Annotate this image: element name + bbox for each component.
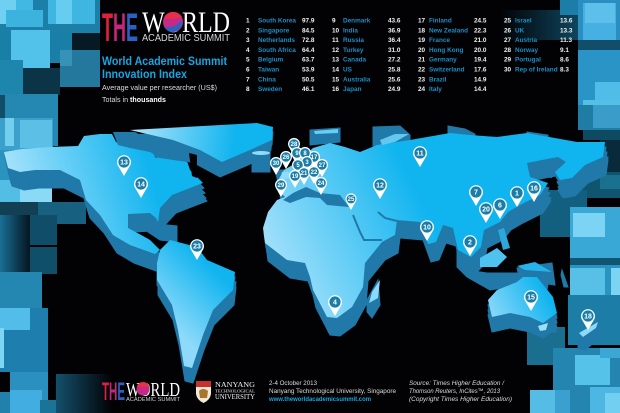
- table: ranks 17 to 24: 20.0: [474, 47, 487, 54]
- table: ranks 25 to 30: 25: [504, 18, 512, 24]
- table: ranks 9 to 16: Turkey: [343, 47, 364, 54]
- map pins: large: 20: [482, 206, 490, 214]
- footer: event details: [268, 380, 397, 403]
- table: ranks 17 to 24: 19: [418, 37, 426, 44]
- table: ranks 25 to 30: 9.1: [560, 47, 569, 54]
- map pins: Europe cluster: 25: [348, 197, 355, 203]
- footer: source: [409, 380, 512, 403]
- footer: event details: 2-4 October 2013: [269, 380, 318, 387]
- table: ranks 9 to 16: 13: [332, 57, 340, 64]
- table: ranks 1 to 8: 1: [246, 18, 250, 24]
- table: ranks 9 to 16: Russia: [343, 37, 364, 44]
- map pins: large: [117, 146, 595, 330]
- table: ranks 1 to 8: China: [258, 76, 276, 83]
- table: ranks 17 to 24: Germany: [429, 57, 457, 64]
- map pins: Europe cluster: 19: [292, 174, 299, 180]
- table: ranks 25 to 30: 13.6: [560, 18, 573, 24]
- map pins: large: 6: [498, 202, 502, 210]
- table: ranks 9 to 16: 10: [332, 27, 340, 34]
- table: ranks 17 to 24: 22.3: [474, 27, 487, 34]
- table: ranks 17 to 24: 19.4: [474, 57, 487, 64]
- map pins: large: 2: [468, 240, 472, 246]
- title: [102, 54, 227, 81]
- table: ranks 1 to 8: 6: [246, 66, 250, 74]
- map pins: Europe cluster: 26: [283, 155, 290, 161]
- table: ranks 25 to 30: 8.3: [560, 66, 569, 74]
- map pins: large: 16: [530, 186, 538, 192]
- map pins: Europe cluster: 27: [319, 163, 326, 169]
- map: small islands: [252, 129, 598, 337]
- table: ranks 9 to 16: 16: [332, 86, 340, 93]
- table: ranks 25 to 30: 28: [504, 47, 512, 54]
- table: ranks 25 to 30: 26: [504, 27, 512, 34]
- table: ranks 1 to 8: 46.1: [302, 86, 315, 93]
- table: ranks 17 to 24: 23: [418, 76, 426, 83]
- map pins: large: 14: [137, 182, 145, 188]
- table: ranks 25 to 30: Austria: [515, 37, 537, 44]
- table: ranks 1 to 8: Belgium: [258, 57, 284, 64]
- table: ranks 9 to 16: US: [343, 66, 353, 74]
- footer: event details: Nanyang Technological University, Singapore: [269, 388, 397, 395]
- map pins: Europe cluster: 8: [303, 151, 307, 157]
- footer logo: The World Academic Summit: ACADEMIC SUMMIT: [126, 397, 181, 403]
- table: ranks 17 to 24: New Zealand: [429, 27, 468, 34]
- map pins: Europe cluster: 17: [311, 155, 318, 161]
- map pins: Europe cluster: 24: [318, 181, 325, 187]
- footer logo: NTU wordmark: NANYANG: [215, 381, 255, 389]
- table: ranks 9 to 16: Denmark: [343, 18, 371, 24]
- table: ranks 1 to 8: Singapore: [258, 27, 290, 34]
- map: Greenland and Arctic Canada: [113, 123, 273, 178]
- table: ranks 25 to 30: Norway: [515, 47, 539, 54]
- title: World Academic Summit: [102, 54, 227, 68]
- footer: source: Thomson Reuters, InCites™, 2013: [409, 388, 501, 395]
- table: ranks 17 to 24: Hong Kong: [429, 47, 464, 54]
- footer logo: NTU wordmark: UNIVERSITY: [215, 393, 255, 401]
- table: ranks 9 to 16: Australia: [343, 76, 371, 83]
- subtitle: totals: Totals in thousands: [102, 95, 166, 104]
- table: ranks 17 to 24: 14.4: [474, 86, 487, 93]
- table: ranks 25 to 30: Israel: [515, 18, 532, 24]
- logo globe: [163, 12, 183, 32]
- table: ranks 17 to 24: France: [429, 37, 450, 44]
- map pins: Europe cluster: 3: [305, 160, 309, 166]
- table: ranks 1 to 8: 50.5: [302, 76, 315, 83]
- footer: event details: www.theworldacademicsummit.com: [268, 396, 371, 403]
- table: ranks 9 to 16: Canada: [343, 57, 367, 64]
- table: ranks 1 to 8: 5: [246, 57, 250, 64]
- table: ranks 1 to 8: 64.4: [302, 47, 315, 54]
- table: ranks 1 to 8: 63.7: [302, 57, 315, 64]
- table: ranks 9 to 16: 14: [332, 66, 340, 74]
- table: ranks 17 to 24: [418, 18, 487, 93]
- map: North America: [4, 134, 203, 254]
- table: ranks 1 to 8: 4: [246, 47, 250, 54]
- table: ranks 9 to 16: 25.6: [388, 76, 401, 83]
- table: ranks 17 to 24: 24.5: [474, 18, 487, 24]
- table: ranks 17 to 24: 17.6: [474, 66, 487, 74]
- table: ranks 1 to 8: South Africa: [258, 47, 296, 54]
- table: ranks 9 to 16: 12: [332, 47, 340, 54]
- table: ranks 1 to 8: Netherlands: [258, 37, 295, 44]
- table: ranks 9 to 16: 31.0: [388, 47, 401, 54]
- map: South America: [157, 240, 235, 368]
- map pins: large: 13: [120, 160, 128, 166]
- footer logo: NTU crest: [196, 381, 211, 403]
- panel: right decorative squares: [500, 0, 620, 413]
- table: ranks 25 to 30: 29: [504, 57, 512, 64]
- table: ranks 1 to 8: South Korea: [258, 18, 296, 24]
- table: ranks 17 to 24: Italy: [429, 86, 442, 93]
- table: ranks 25 to 30: [504, 18, 573, 74]
- map pins: Europe cluster: 22: [311, 170, 318, 176]
- table: ranks 25 to 30: Rep of Ireland: [515, 66, 558, 74]
- title: Innovation Index: [102, 67, 187, 81]
- footer logo: The World Academic Summit: WORLD: [126, 379, 180, 401]
- table: ranks 1 to 8: 97.9: [302, 18, 315, 24]
- map pins: Europe cluster: 30: [273, 161, 280, 167]
- table: ranks 25 to 30: UK: [515, 27, 525, 34]
- table: ranks 1 to 8: 53.9: [302, 66, 315, 74]
- footer: source: (Copyright Times Higher Education): [409, 396, 512, 403]
- table: ranks 25 to 30: 13.3: [560, 27, 573, 34]
- table: ranks 25 to 30: 11.3: [560, 37, 573, 44]
- table: ranks 1 to 8: 8: [246, 86, 250, 93]
- table: ranks 1 to 8: Taiwan: [258, 66, 279, 74]
- table: ranks 9 to 16: Japan: [343, 86, 362, 93]
- map pins: Europe cluster: 5: [296, 163, 300, 169]
- table: ranks 1 to 8: 2: [246, 27, 250, 34]
- table: ranks 17 to 24: 24: [418, 86, 426, 93]
- table: ranks 17 to 24: 17: [418, 18, 426, 24]
- table: ranks 17 to 24: Switzerland: [429, 66, 465, 74]
- map pins: large: 1: [515, 190, 519, 198]
- logo wordmark WORLD: WORLD: [142, 6, 230, 39]
- footer logo: NTU wordmark: [215, 381, 255, 401]
- map pins: large: 23: [193, 244, 201, 250]
- table: ranks 1 to 8: 72.8: [302, 37, 315, 44]
- map pins: Europe cluster: 28: [291, 142, 298, 148]
- logo subtitle: ACADEMIC SUMMIT: [142, 33, 230, 44]
- map pins: large: 4: [333, 300, 337, 306]
- table: ranks 9 to 16: 9: [332, 18, 336, 24]
- table: ranks 17 to 24: 21: [418, 57, 426, 64]
- map pins: large: 10: [423, 224, 431, 232]
- table: ranks 1 to 8: [246, 18, 315, 93]
- table: ranks 9 to 16: 27.2: [388, 57, 401, 64]
- map pins: large: 11: [416, 150, 424, 158]
- map pins: Europe cluster: [270, 138, 356, 210]
- logo: The World Academic Summit: [102, 6, 230, 50]
- logo wordmark THE: THE: [102, 6, 138, 50]
- footer logo: The World Academic Summit: [102, 378, 181, 406]
- table: ranks 17 to 24: Brazil: [429, 76, 447, 83]
- map pins: large: 7: [474, 190, 478, 196]
- table: ranks 9 to 16: 11: [332, 37, 339, 44]
- map: Australia: [488, 277, 557, 323]
- footer logo: The World Academic Summit: THE: [102, 378, 125, 406]
- table: ranks 17 to 24: 14.9: [474, 76, 487, 83]
- table: ranks 17 to 24: Finland: [429, 18, 452, 24]
- map pins: large: 15: [527, 294, 535, 302]
- table: ranks 1 to 8: 3: [246, 37, 250, 44]
- table: ranks 1 to 8: 7: [246, 76, 250, 83]
- table: ranks 25 to 30: Portugal: [515, 57, 541, 64]
- table: ranks 9 to 16: 36.4: [388, 37, 401, 44]
- table: ranks 9 to 16: [332, 18, 401, 93]
- map pins: Europe cluster: 29: [278, 183, 285, 189]
- table: ranks 9 to 16: 25.8: [388, 66, 401, 74]
- table: ranks 17 to 24: 22: [418, 66, 426, 74]
- table: ranks 17 to 24: 21.0: [474, 37, 487, 44]
- map pins: Europe cluster: 21: [301, 171, 308, 177]
- table: ranks 25 to 30: 30: [504, 66, 512, 74]
- table: ranks 1 to 8: Sweden: [258, 86, 282, 93]
- map pins: large: 12: [376, 182, 384, 190]
- table: ranks 9 to 16: 15: [332, 76, 340, 83]
- map: extrusion of the continents: [5, 126, 608, 383]
- panel: left decorative squares: [0, 0, 112, 413]
- table: ranks 9 to 16: India: [343, 27, 358, 34]
- footer logo: NTU wordmark: TECHNOLOGICAL: [215, 388, 255, 394]
- subtitle: average value: Average value per researcher (US$): [102, 83, 217, 92]
- table: ranks 9 to 16: 43.6: [388, 18, 401, 24]
- map: Eurasia and Africa: [263, 133, 605, 318]
- map pins: Europe cluster: 9: [295, 151, 299, 157]
- table: ranks 9 to 16: 36.9: [388, 27, 401, 34]
- table: ranks 9 to 16: 24.9: [388, 86, 401, 93]
- table: ranks 25 to 30: 27: [504, 37, 512, 44]
- table: ranks 25 to 30: 8.6: [560, 57, 569, 64]
- map pins: large: 18: [584, 314, 592, 320]
- table: ranks 17 to 24: 20: [418, 47, 426, 54]
- footer: source: Source: Times Higher Education /: [409, 380, 505, 387]
- table: ranks 1 to 8: 84.5: [302, 27, 315, 34]
- table: ranks 17 to 24: 18: [418, 27, 426, 34]
